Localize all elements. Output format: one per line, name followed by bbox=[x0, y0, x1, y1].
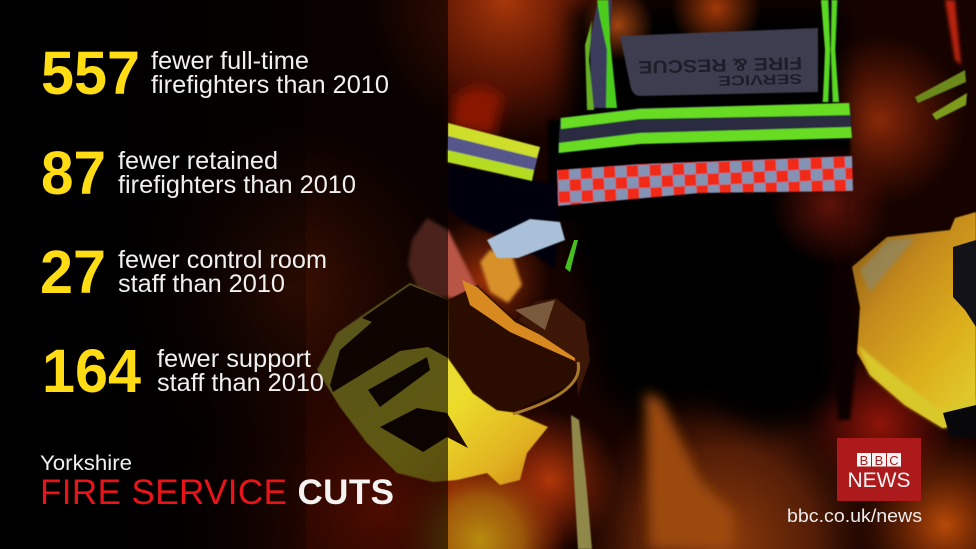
stat: 557 full-time firefighters: firefighters than 2010 bbox=[151, 71, 389, 99]
stat: 164 support staff bbox=[42, 337, 324, 405]
stat: 87 retained firefighters: firefighters than 2010 bbox=[118, 171, 356, 199]
jacket: name badge: SERVICE bbox=[718, 71, 802, 89]
stat: 27 control room staff: 27 bbox=[40, 238, 106, 306]
stat: 87 retained firefighters: 87 bbox=[41, 139, 106, 207]
title: FIRE SERVICE CUTS bbox=[40, 473, 394, 512]
right sleeve reflective stripes bbox=[915, 0, 967, 120]
BBC News logo: B bbox=[875, 453, 883, 468]
jacket: name badge: FIRE & RESCUE bbox=[638, 53, 802, 77]
stat: 27 control room staff: fewer control room bbox=[118, 246, 327, 274]
stat: 164 support staff: staff than 2010 bbox=[157, 369, 324, 397]
stat: 164 support staff: fewer support bbox=[157, 345, 311, 373]
left yellow helmet bbox=[317, 280, 590, 485]
website url: bbc.co.uk/news bbox=[787, 505, 922, 526]
BBC News logo: B bbox=[860, 453, 868, 468]
sleeve: cuff with reflective stripes bbox=[447, 123, 540, 181]
jacket: hi-vis waist band bbox=[558, 103, 852, 153]
stat: 27 control room staff bbox=[40, 238, 327, 306]
BBC News logo: C bbox=[889, 453, 899, 468]
stat: 557 full-time firefighters: fewer full-time bbox=[151, 47, 309, 75]
stat: 557 full-time firefighters: 557 bbox=[41, 39, 140, 107]
jacket: shoulder straps bbox=[585, 0, 840, 110]
stat: 87 retained firefighters: fewer retained bbox=[118, 147, 278, 175]
reflective trouser stripe bbox=[571, 415, 592, 549]
stat: 557 full-time firefighters bbox=[41, 39, 389, 107]
glove and hand bbox=[408, 218, 578, 303]
stat: 164 support staff: 164 bbox=[42, 337, 141, 405]
firefighter: jacket body bbox=[448, 5, 858, 430]
BBC News logo bbox=[837, 438, 921, 501]
stat: 87 retained firefighters bbox=[41, 139, 356, 207]
stat: 27 control room staff: staff than 2010 bbox=[118, 270, 285, 298]
right yellow helmet bbox=[852, 212, 976, 437]
BBC News logo: NEWS bbox=[848, 469, 910, 492]
jacket: name badge bbox=[620, 28, 818, 96]
dark overlay panel on left bbox=[0, 0, 448, 549]
jacket: red and silver chequered band bbox=[557, 156, 853, 206]
location label: Yorkshire bbox=[40, 452, 132, 475]
